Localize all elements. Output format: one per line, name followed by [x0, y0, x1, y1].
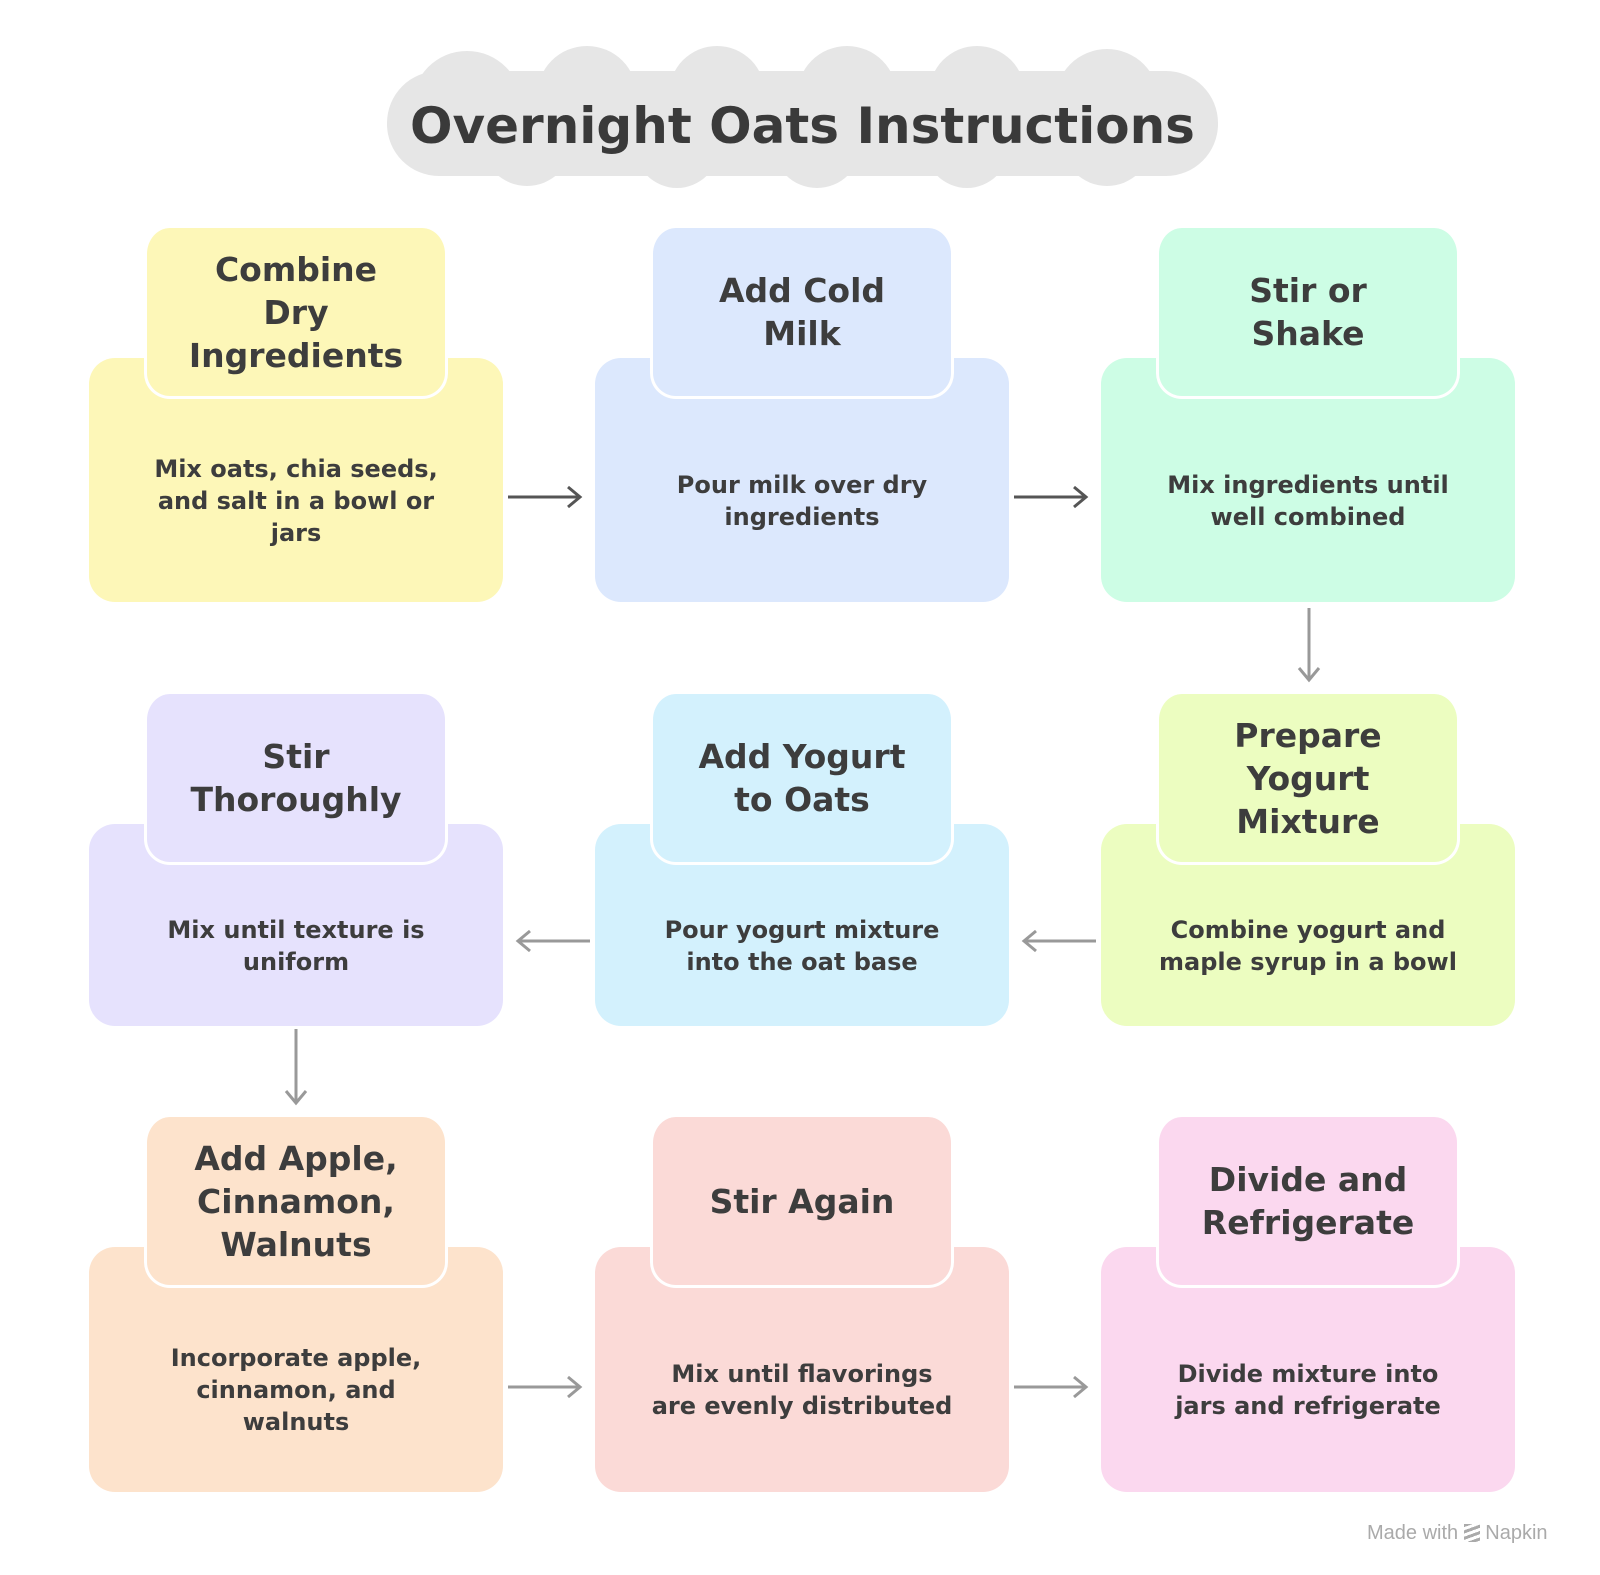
step 9: Divide and — [1209, 1160, 1407, 1199]
step 5: add yogurt — [595, 694, 1009, 1026]
step 6: stir thoroughly — [89, 694, 503, 1026]
step 6: stir thoroughly: Thoroughly — [190, 780, 402, 819]
step 3: Mix ingredients until well combined — [1167, 470, 1449, 530]
step 6: stir thoroughly: Mix until texture is uniform — [167, 916, 425, 976]
step 5: add yogurt: Pour yogurt mixture into the oat base — [665, 916, 939, 976]
arrow 8 to 9 — [1014, 1376, 1088, 1398]
step 1: Ingredients — [189, 336, 403, 374]
step 4: prepare yogurt: Prepare — [1234, 716, 1382, 754]
step 7: Incorporate apple, cinnamon, and walnuts — [171, 1344, 421, 1436]
step 9: Divide mixture into jars and refrigerate — [1175, 1360, 1441, 1420]
step 4: prepare yogurt — [1101, 694, 1515, 1026]
step 2 — [595, 228, 1009, 602]
step 7: Walnuts — [220, 1224, 372, 1264]
step 1: Dry — [263, 292, 329, 332]
step 3 — [1101, 228, 1515, 602]
step 2: Pour milk over dry ingredients — [677, 470, 927, 530]
step 9 — [1101, 1117, 1515, 1492]
step 1 — [89, 228, 503, 602]
step 5: add yogurt: to Oats — [734, 780, 870, 819]
step 4: prepare yogurt: Yogurt — [1247, 758, 1369, 798]
step 8: Stir Again — [710, 1182, 894, 1220]
step 8 — [595, 1117, 1009, 1492]
step 6: stir thoroughly: Stir — [262, 737, 330, 776]
arrow 7 to 8 — [508, 1376, 582, 1398]
step 4: prepare yogurt: Combine yogurt and maple syrup in a bowl — [1159, 916, 1457, 976]
step 2: Milk — [763, 314, 841, 353]
step 9: Refrigerate — [1202, 1203, 1414, 1242]
step 3: Shake — [1252, 314, 1364, 353]
arrow 6 down — [285, 1029, 307, 1106]
step 7: Cinnamon, — [197, 1182, 395, 1220]
arrow 1 to 2 — [508, 486, 582, 508]
step 7 — [89, 1117, 503, 1492]
arrow 2 to 3 — [1014, 486, 1088, 508]
step 8: Mix until flavorings are evenly distributed — [652, 1360, 952, 1420]
step 2: Add Cold — [719, 271, 885, 310]
step 1: Combine — [215, 250, 377, 288]
step 1: Mix oats, chia seeds, and salt in a bowl or jars — [154, 454, 438, 546]
title: Overnight Oats Instructions — [410, 97, 1195, 155]
arrow 3 down — [1298, 608, 1320, 682]
step 5: add yogurt: Add Yogurt — [698, 737, 905, 776]
step 3: Stir or — [1249, 271, 1367, 310]
arrow 5 to 6 — [516, 930, 590, 952]
step 7: Add Apple, — [194, 1138, 398, 1178]
step 4: prepare yogurt: Mixture — [1236, 802, 1380, 840]
title — [387, 46, 1218, 188]
arrow 4 to 5 — [1022, 930, 1096, 952]
footer: made with napkin: Made with Napkin — [1367, 1522, 1548, 1544]
